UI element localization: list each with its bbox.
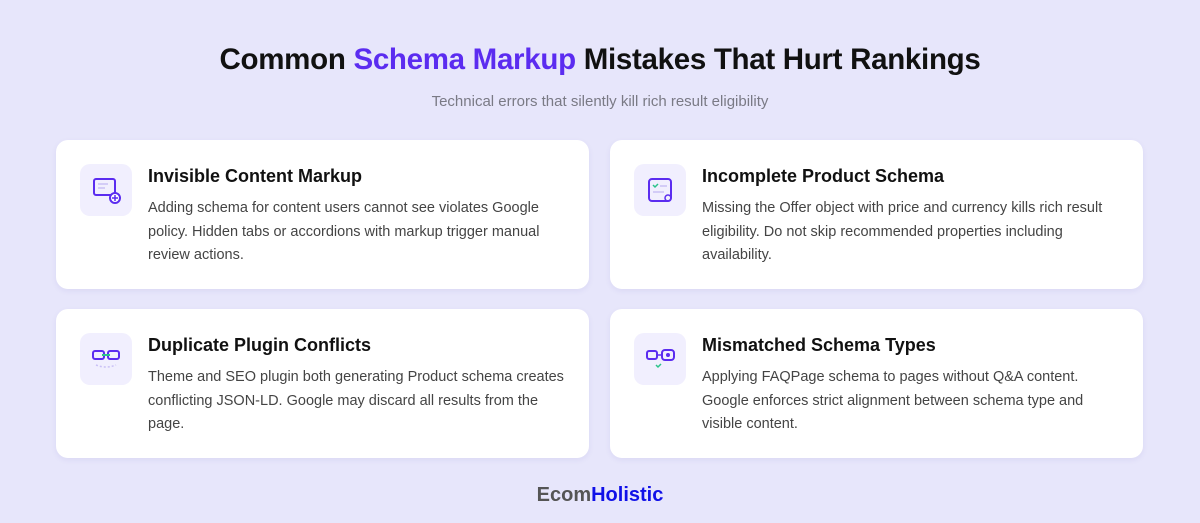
panel: duplicate plugin conflicts <box>56 309 589 458</box>
card heading: Duplicate Plugin Conflicts <box>148 335 371 355</box>
panel: incomplete product schema <box>610 140 1143 289</box>
card text: Adding schema for content users cannot see violates Google policy. Hidden tabs or accordions with markup trigger manual review actions. <box>148 200 539 263</box>
card text: Missing the Offer object with price and currency kills rich result eligibility. Do not skip recommended properties including availability. <box>702 200 1102 263</box>
panel: mismatched schema types <box>610 309 1143 458</box>
logo: EcomHolistic <box>537 484 663 506</box>
icon: screen with plus <box>80 164 132 216</box>
card heading: Mismatched Schema Types <box>702 335 936 355</box>
panel: invisible content markup <box>56 140 589 289</box>
title: Common Schema Markup Mistakes That Hurt Rankings <box>220 43 980 76</box>
icon: linked blocks <box>80 333 132 385</box>
card heading: Invisible Content Markup <box>148 166 362 186</box>
subtitle: Technical errors that silently kill rich result eligibility <box>432 93 768 110</box>
card heading: Incomplete Product Schema <box>702 166 944 186</box>
icon: checklist <box>634 164 686 216</box>
card text: Applying FAQPage schema to pages without Q&A content. Google enforces strict alignment between schema type and visible content. <box>702 369 1083 432</box>
icon: mismatched blocks <box>634 333 686 385</box>
card text: Theme and SEO plugin both generating Product schema creates conflicting JSON-LD. Google may discard all results from the page. <box>148 369 564 432</box>
